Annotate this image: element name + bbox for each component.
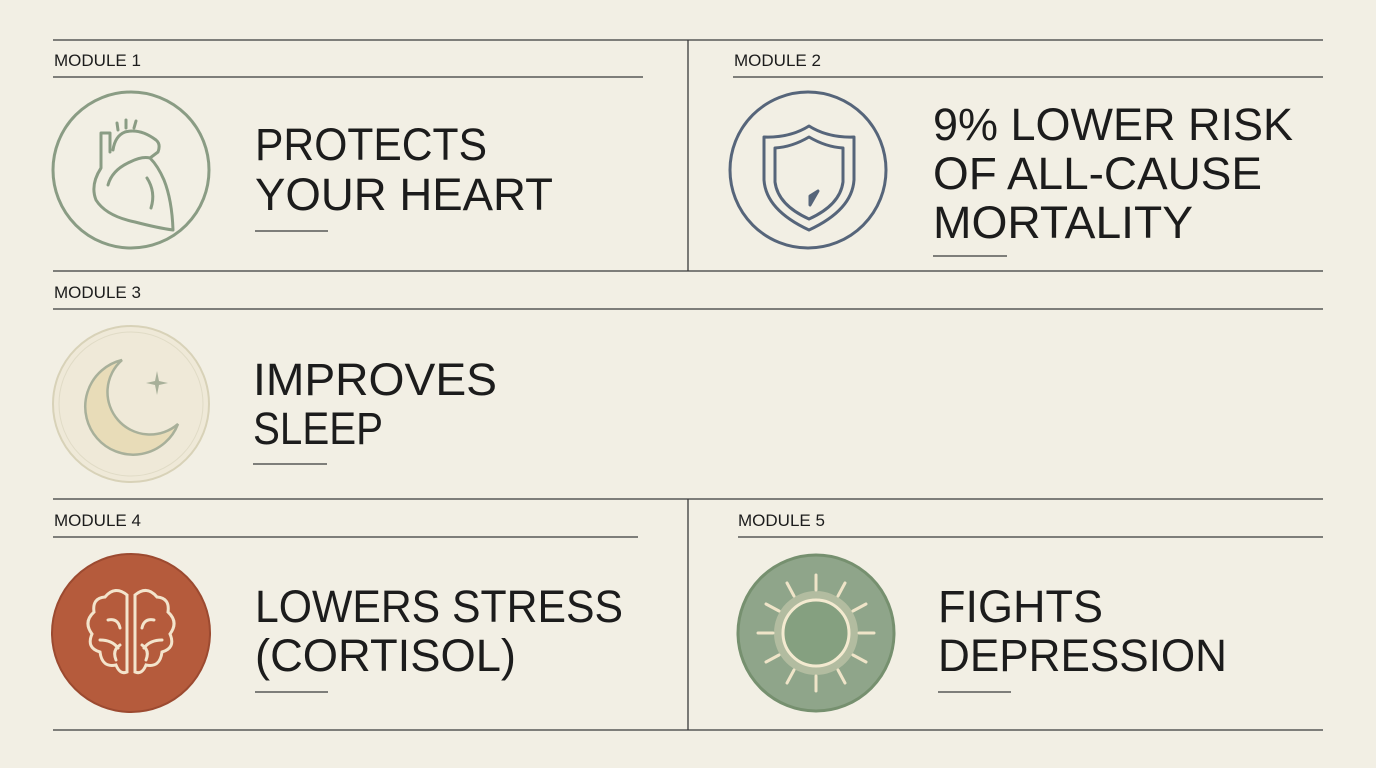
panel: module 4: (CORTISOL) — [255, 630, 516, 681]
panel: module 2 — [730, 51, 1293, 248]
panel: module 2: OF ALL-CAUSE — [933, 148, 1262, 199]
panel: module 4 — [52, 511, 623, 712]
panel: module 3: SLEEP — [253, 403, 383, 454]
panel: module 1 — [53, 51, 553, 248]
label: module 3: MODULE 3 — [54, 283, 141, 302]
label: module 1: MODULE 1 — [54, 51, 141, 70]
icon: moon — [53, 326, 209, 482]
title: fights depression: FIGHTS — [938, 581, 1103, 632]
panel: module 3 — [53, 283, 497, 482]
icon: shield — [730, 92, 886, 248]
label: module 5: MODULE 5 — [738, 511, 825, 530]
icon: heart — [53, 92, 209, 248]
panel: module 1: YOUR HEART — [255, 169, 553, 220]
label: module 4: MODULE 4 — [54, 511, 141, 530]
title: improves sleep: IMPROVES — [253, 354, 497, 405]
icon: sun — [738, 555, 894, 711]
icon: brain — [52, 554, 210, 712]
panel: module 5 — [738, 511, 1227, 711]
panel: module 2: MORTALITY — [933, 197, 1193, 248]
title: lowers stress: LOWERS STRESS — [255, 581, 623, 632]
title: protects your heart: PROTECTS — [255, 119, 487, 170]
panel: module 5: DEPRESSION — [938, 630, 1227, 681]
label: module 2: MODULE 2 — [734, 51, 821, 70]
title: 9% lower risk: 9% LOWER RISK — [933, 99, 1293, 150]
